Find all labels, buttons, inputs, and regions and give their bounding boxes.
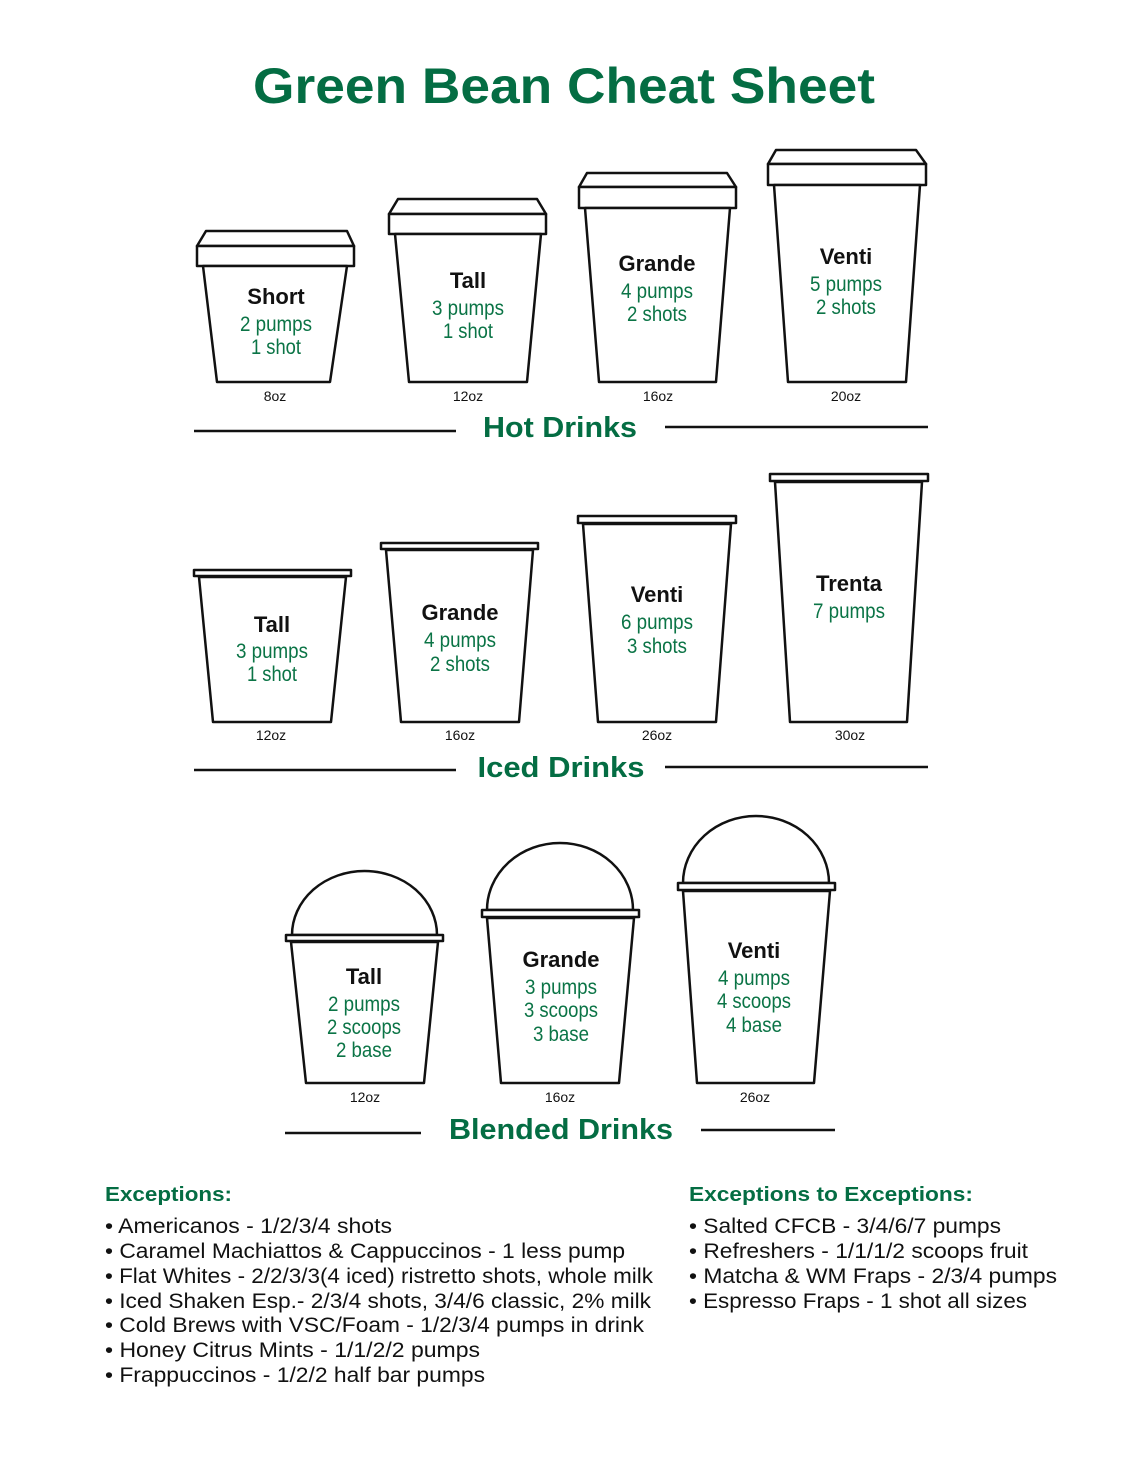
exceptions to exceptions list: • Salted CFCB - 3/4/6/7 pumps [689,1215,1001,1238]
heading: iced drinks: Iced Drinks [478,752,644,784]
iced cup: grande: Grande [421,600,499,625]
hot cup: grande: 2 shots [627,303,687,326]
blended cup: grande: 16oz [545,1089,575,1105]
exceptions list: • Honey Citrus Mints - 1/1/2/2 pumps [105,1339,480,1362]
blended cup: grande [482,843,639,1105]
exceptions to exceptions list: • Refreshers - 1/1/1/2 scoops fruit [689,1240,1028,1263]
heading: blended drinks: Blended Drinks [449,1114,673,1146]
hot cup: grande: Grande [618,251,696,276]
hot cup: venti: 5 pumps [810,273,882,296]
exceptions list: Exceptions: [105,1184,232,1206]
iced cup: trenta [770,474,928,743]
exceptions to exceptions list [689,1184,1057,1313]
hot cup: venti: 20oz [831,388,861,404]
hot cup: tall: 12oz [453,388,483,404]
iced cup: tall: Tall [254,612,290,637]
exceptions list: • Frappuccinos - 1/2/2 half bar pumps [105,1364,485,1387]
iced cup: tall [194,570,351,743]
hot cup: short: Short [247,284,305,309]
iced cup: venti: 6 pumps [621,611,693,634]
hot cup: grande: 16oz [643,388,673,404]
exceptions to exceptions list: • Espresso Fraps - 1 shot all sizes [689,1290,1027,1313]
blended cup: tall: Tall [346,964,382,989]
hot cup: short: 1 shot [251,336,301,359]
iced cup: venti: 26oz [642,727,672,743]
blended cup: tall: 12oz [350,1089,380,1105]
hot cup: tall: Tall [450,268,486,293]
iced cup: tall: 12oz [256,727,286,743]
iced cup: venti [578,516,736,743]
iced cup: trenta: Trenta [816,571,883,596]
hot cup: short: 8oz [264,388,286,404]
blended cup: grande: Grande [522,947,600,972]
iced cup: venti: 3 shots [627,635,687,658]
exceptions list: • Americanos - 1/2/3/4 shots [105,1215,392,1238]
blended cup: tall: 2 base [336,1039,392,1062]
hot cup: short: 2 pumps [240,313,312,336]
blended cup: venti: 4 pumps [718,967,790,990]
title: Green Bean Cheat Sheet [253,58,875,114]
hot cup: venti: Venti [820,244,872,269]
blended cup: grande: 3 base [533,1023,589,1046]
exceptions list: • Iced Shaken Esp.- 2/3/4 shots, 3/4/6 classic, 2% milk [105,1290,652,1313]
iced cup: tall: 1 shot [247,663,297,686]
heading: hot drinks: Hot Drinks [483,412,637,444]
blended cup: tall: 2 scoops [327,1016,401,1039]
exceptions list: • Cold Brews with VSC/Foam - 1/2/3/4 pumps in drink [105,1314,645,1337]
hot cup: tall [389,199,546,404]
iced cup: grande: 4 pumps [424,629,496,652]
blended cup: venti: 4 scoops [717,990,791,1013]
iced cup: trenta: 30oz [835,727,865,743]
hot cup: venti [768,150,926,404]
exceptions to exceptions list: • Matcha & WM Fraps - 2/3/4 pumps [689,1265,1057,1288]
exceptions to exceptions list: Exceptions to Exceptions: [689,1184,973,1206]
exceptions list: • Caramel Machiattos & Cappuccinos - 1 less pump [105,1240,625,1263]
iced cup: trenta: 7 pumps [813,600,885,623]
iced cup: tall: 3 pumps [236,640,308,663]
blended cup: venti: Venti [728,938,780,963]
hot cup: venti: 2 shots [816,296,876,319]
blended cup: grande: 3 pumps [525,976,597,999]
iced cup: grande [381,543,538,743]
hot cup: tall: 3 pumps [432,297,504,320]
hot cup: grande [579,173,736,404]
blended cup: venti [678,816,835,1105]
iced cup: grande: 16oz [445,727,475,743]
blended cup: tall: 2 pumps [328,993,400,1016]
iced cup: grande: 2 shots [430,653,490,676]
blended cup: venti: 4 base [726,1014,782,1037]
exceptions list [105,1184,654,1387]
hot cup: tall: 1 shot [443,320,493,343]
blended cup: venti: 26oz [740,1089,770,1105]
hot cup: grande: 4 pumps [621,280,693,303]
iced cup: venti: Venti [631,582,683,607]
blended cup: grande: 3 scoops [524,999,598,1022]
exceptions list: • Flat Whites - 2/2/3/3(4 iced) ristretto shots, whole milk [105,1265,654,1288]
blended cup: tall [286,871,443,1105]
hot cup: short [197,231,354,404]
